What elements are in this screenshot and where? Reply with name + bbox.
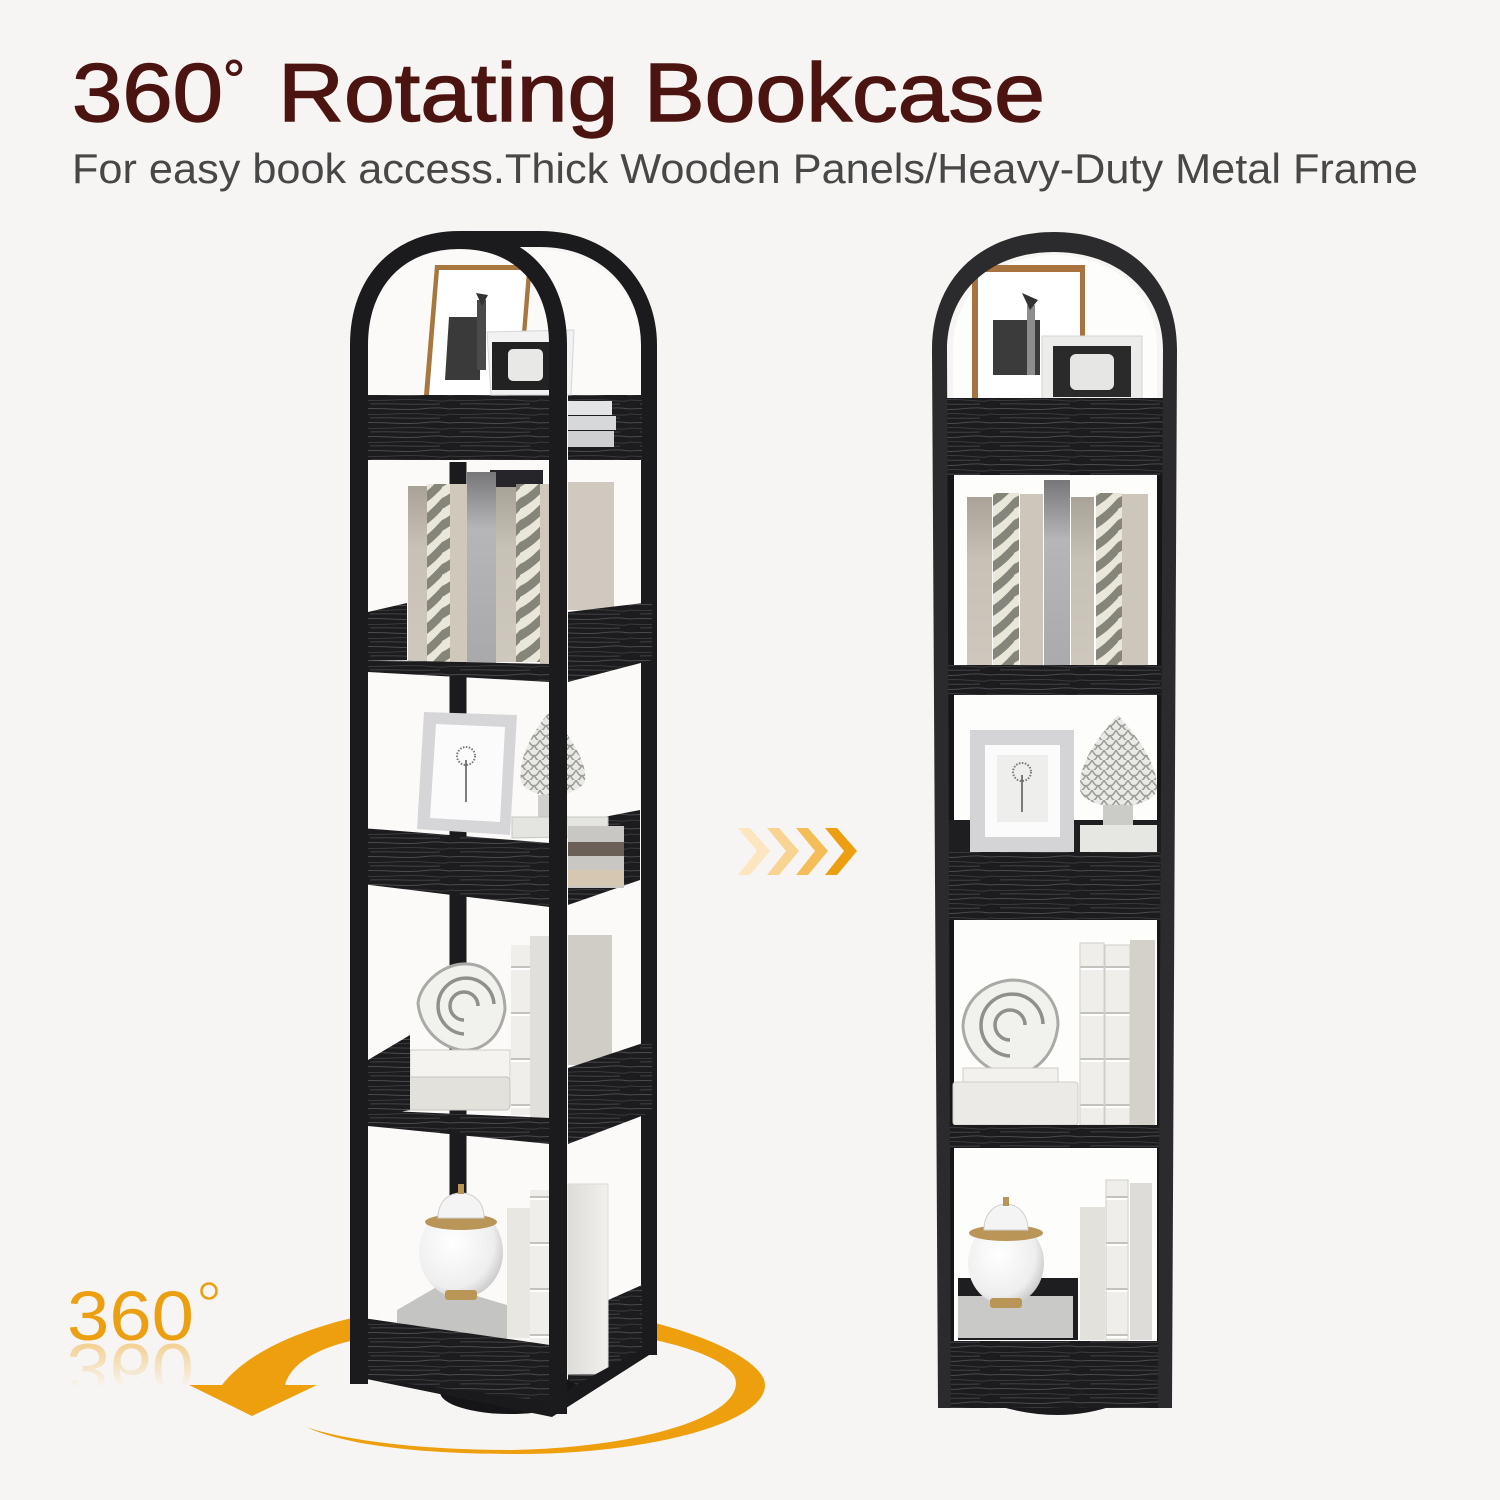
third shelf front panel <box>362 828 550 907</box>
fourth shelf boards <box>368 1035 652 1144</box>
white back opening <box>953 255 1157 1400</box>
third shelf items <box>417 711 624 888</box>
framed photos <box>972 265 1142 403</box>
bottom shelf items <box>958 1180 1152 1340</box>
picture frames on top <box>424 265 574 395</box>
bookcase: rotated view <box>352 239 657 1417</box>
third shelf frame and pine cone <box>948 715 1160 852</box>
back arch and rear posts <box>458 239 649 1355</box>
label: 360 degrees with reflection: 360 <box>67 1329 194 1407</box>
bottom front panel and base <box>352 1318 657 1417</box>
title: Rotating Bookcase <box>278 46 1045 139</box>
arrow chevrons <box>738 828 857 875</box>
fourth shelf items <box>953 940 1155 1125</box>
fourth shelf items <box>392 935 612 1118</box>
second shelf boards <box>368 602 652 682</box>
label: 360 degrees with reflection <box>67 1277 216 1407</box>
bottom shelf back board <box>568 1285 642 1390</box>
title: ˚ <box>224 53 247 131</box>
second shelf board <box>947 665 1161 695</box>
white interior <box>368 250 641 1330</box>
third shelf boards back <box>568 810 640 905</box>
front arch and front posts <box>359 240 558 1414</box>
bottom shelf items <box>397 1184 608 1385</box>
label: 360 degrees with reflection: 360 <box>67 1277 194 1355</box>
icon: 360 degree rotation arrow <box>189 1315 765 1454</box>
top shelf with books <box>368 395 642 460</box>
base panel <box>938 1341 1172 1415</box>
title: 360 <box>72 46 223 139</box>
arched frame and side posts <box>932 232 1177 1408</box>
third shelf panel <box>947 852 1162 920</box>
inner dark rear posts <box>947 475 1164 1341</box>
top panel <box>946 398 1163 475</box>
second shelf books <box>967 480 1148 680</box>
fourth shelf board <box>949 1125 1160 1148</box>
subtitle: For easy book access.Thick Wooden Panels/Heavy-Duty Metal Frame <box>72 145 1418 192</box>
bookcase: front view <box>932 232 1177 1415</box>
second shelf books <box>408 470 614 664</box>
